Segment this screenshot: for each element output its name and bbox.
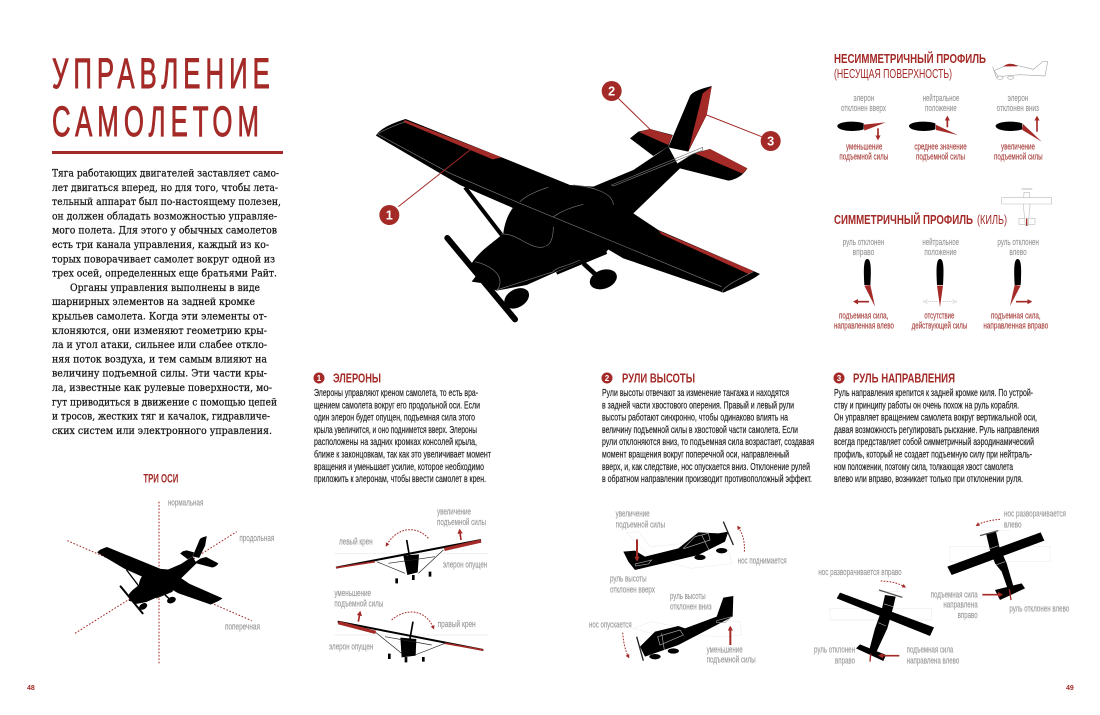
labels: grey states: положение: [925, 103, 957, 113]
labels: lift effect: подъемной силы: [916, 151, 965, 161]
nose up labels: увеличение: [616, 509, 650, 519]
icon: plane side outline: [993, 62, 1048, 79]
page number left: 48: [27, 685, 35, 692]
body text: щением самолета вокруг его продольной оси. Если: [314, 400, 480, 411]
body text: приложить к элеронам, чтобы ввести самолет в крен.: [314, 473, 486, 485]
heading: РУЛИ ВЫСОТЫ: [622, 370, 695, 386]
nose down labels: уменьшение: [707, 644, 743, 654]
symmetric diagrams: [834, 189, 1052, 330]
body text: в обратном направлении производит противоположный эффект.: [602, 473, 812, 485]
left roll labels: увеличение: [437, 506, 471, 516]
labels: lift effect: [839, 141, 1043, 161]
body text: в задней части хвостового оперения. Правый и левый рули: [602, 400, 794, 411]
yaw right labels: [814, 567, 959, 665]
right roll plane: [335, 612, 488, 662]
right roll labels: правый крен: [438, 619, 476, 629]
heading: (НЕСУЩАЯ ПОВЕРХНОСТЬ): [834, 66, 952, 81]
nose down labels: нос опускается: [589, 619, 632, 629]
callout lines: [398, 98, 762, 207]
text block: intro: Тяга работающих двигателей заставляет само-: [52, 168, 279, 180]
heading: РУЛЬ НАПРАВЛЕНИЯ: [853, 370, 955, 386]
labels: force: подъемная сила,: [991, 310, 1041, 320]
labels: grey states: руль отклонен: [997, 237, 1039, 247]
text block: intro: трех осей, определенных еще братьями Райт.: [52, 268, 277, 280]
body text: расположены на задних кромках консолей крыла,: [314, 437, 477, 448]
body text: вверх, и, как следствие, нос опускается вниз. Отклонение рулей: [602, 462, 810, 473]
yaw right labels: направлена влево: [907, 655, 959, 665]
labels: grey states: [841, 93, 1039, 113]
labels: grey states: отклонен вниз: [997, 103, 1039, 113]
nose up labels: [610, 509, 787, 594]
text block: intro: крыльев самолета. Когда эти элементы от-: [52, 310, 267, 322]
text block: intro: он должен обладать возможностью управляе-: [52, 210, 277, 222]
foils: [864, 259, 1021, 307]
body text: высоты работают синхронно, чтобы одинаково влиять на: [602, 412, 788, 424]
text block: intro: гут приводиться в движение с помощью цепей: [52, 396, 277, 408]
text block: intro: ла, известные как рулевые поверхности, мо-: [52, 382, 272, 394]
axis labels: нормальная: [168, 498, 203, 508]
left roll labels: левый крен: [339, 536, 373, 546]
airfoils: [837, 122, 1042, 142]
title: САМОЛЕТОМ: [52, 97, 259, 146]
diagram: yaw: [814, 509, 1069, 665]
callout 3: 3: [767, 135, 774, 149]
icon: number 1: [314, 372, 324, 384]
yaw right labels: подъемная сила: [907, 645, 953, 655]
nose up plane: [623, 522, 744, 570]
axis labels: продольная: [239, 533, 274, 543]
airfoil diagrams: [837, 62, 1048, 161]
panel: asymmetric airfoil: [834, 51, 1048, 161]
yaw right plane: [830, 581, 934, 662]
labels: force: действующей силы: [912, 320, 967, 330]
heading: ТРИ ОСИ: [143, 471, 178, 485]
left roll labels: элерон опущен: [443, 560, 487, 570]
labels: grey states: положение: [924, 247, 957, 257]
labels: grey states: нейтральное: [923, 93, 959, 103]
text block: intro: и тросов, жестких тяг и качалок, гидравличе-: [52, 411, 270, 423]
text block: intro: есть три канала управления, каждый из ко-: [52, 239, 269, 251]
icon: number 3: 3: [837, 374, 842, 383]
text block: intro: ла и угол атаки, сильнее или слабее откло-: [52, 339, 267, 351]
axis labels: поперечная: [225, 621, 260, 631]
icon: number 2: 2: [605, 374, 610, 383]
labels: grey states: нейтральное: [922, 237, 959, 247]
diagram: roll: [329, 506, 488, 662]
body text: [834, 388, 1039, 485]
right roll labels: [329, 588, 476, 651]
nose down labels: [589, 591, 756, 665]
labels: lift effect: подъемной силы: [839, 151, 888, 161]
nose down labels: руль высоты: [670, 591, 706, 601]
panel: three axes: [67, 471, 274, 665]
yaw left labels: вправо: [958, 610, 978, 620]
title: [52, 49, 283, 154]
yaw left labels: направлена: [943, 600, 978, 610]
labels: grey states: руль отклонен: [843, 237, 884, 247]
section: rudder: [834, 370, 1039, 485]
panel: symmetric airfoil: [834, 189, 1052, 330]
body text: величину подъемной силы в хвостовой части самолета. Если: [602, 425, 798, 436]
arrows: [878, 117, 1037, 139]
diagram: pitch: [589, 509, 787, 665]
text block: intro: [52, 168, 281, 437]
main airplane diagram: [376, 81, 781, 319]
nose down labels: подъемной силы: [707, 655, 756, 665]
axis labels: [168, 498, 274, 631]
yaw left labels: руль отклонен влево: [1009, 604, 1069, 614]
body text: Элероны управляют креном самолета, то есть вра-: [314, 388, 478, 399]
right roll labels: подъемной силы: [334, 599, 383, 609]
text block: intro: лет двигаться вперед, но для того, чтобы лета-: [52, 182, 278, 194]
text block: intro: няя поток воздуха, и тем самым влияют на: [52, 353, 267, 365]
callout 2: [602, 81, 622, 101]
airframe detail lines: [377, 122, 753, 293]
yaw left plane: [947, 519, 1050, 600]
icon: number 1: 1: [317, 374, 322, 383]
heading: СИММЕТРИЧНЫЙ ПРОФИЛЬ: [834, 212, 973, 227]
nose down labels: отклонен вниз: [670, 601, 712, 611]
left roll labels: [339, 506, 487, 570]
labels: grey states: элерон: [1008, 93, 1028, 103]
yaw left labels: [931, 509, 1069, 620]
text block: intro: клоняются, они изменяют геометрию кры-: [52, 325, 267, 337]
text block: intro: торых поворачивает самолет вокруг одной из: [52, 253, 275, 265]
page number right: 49: [1066, 685, 1074, 692]
title: УПРАВЛЕНИЕ: [52, 49, 270, 98]
yaw left labels: нос разворачивается: [1004, 509, 1066, 519]
callout 1: [379, 205, 399, 225]
nose up labels: руль высоты: [610, 574, 647, 584]
labels: grey states: [843, 237, 1039, 257]
labels: force: отсутствие: [924, 310, 954, 320]
labels: force: направленная вправо: [983, 320, 1048, 330]
body text: момент вращения вокруг поперечной оси, направленный: [602, 450, 789, 460]
axes: [67, 502, 252, 665]
labels: grey states: отклонен вверх: [841, 103, 886, 113]
text block: intro: шарнирных элементов на задней кромке: [52, 296, 255, 308]
text block: intro: величину подъемной силы. Эти части кры-: [52, 368, 267, 380]
body text: рули отклоняются вниз, то подъемная сила возрастает, создавая: [602, 437, 814, 448]
body text: [314, 388, 491, 485]
labels: grey states: вправо: [853, 247, 874, 257]
body text: вращения и уменьшает усилие, которое необходимо: [314, 461, 484, 473]
yaw right labels: вправо: [835, 655, 855, 665]
yaw left labels: подъемная сила: [931, 589, 978, 599]
labels: grey states: элерон: [853, 93, 874, 103]
body text: один элерон будет опущен, подъемная сила этого: [314, 412, 475, 424]
icon: number 2: [602, 372, 612, 384]
labels: lift effect: среднее значение: [914, 141, 967, 151]
callout 1: 1: [386, 209, 393, 223]
labels: lift effect: подъемной силы: [994, 151, 1043, 161]
right roll labels: элерон опущен: [329, 641, 373, 651]
yaw left labels: влево: [1004, 519, 1022, 529]
callout 3: [761, 131, 781, 151]
yaw right labels: руль отклонен: [814, 645, 855, 655]
labels: grey states: влево: [1009, 247, 1027, 257]
labels: force: [834, 310, 1048, 330]
labels: lift effect: увеличение: [1001, 141, 1035, 151]
yaw right labels: нос разворачивается вправо: [818, 567, 902, 577]
arrows: [855, 300, 1031, 304]
nose up labels: нос поднимается: [738, 555, 787, 565]
left roll labels: подъемной силы: [437, 517, 486, 527]
nose up labels: отклонен вверх: [610, 584, 655, 594]
icon: plane top outline: [1002, 189, 1052, 226]
section: elevators: [602, 370, 814, 485]
icon: number 3: [834, 372, 844, 384]
text block: intro: Органы управления выполнены в виде: [70, 282, 260, 294]
body text: ближе к законцовкам, так как это увеличивает момент: [314, 448, 491, 460]
text block: intro: тельный аппарат был по-настоящему полезен,: [52, 196, 281, 208]
labels: force: подъемная сила,: [839, 310, 888, 320]
right roll labels: уменьшение: [334, 588, 371, 598]
section: ailerons: [314, 370, 491, 485]
nose up labels: подъемной силы: [616, 519, 665, 529]
nose down plane: [623, 596, 742, 661]
red control surfaces: [403, 87, 753, 274]
heading: ЭЛЕРОНЫ: [333, 370, 381, 386]
text block: intro: мого полета. Для этого у обычных самолетов: [52, 225, 277, 237]
heading: (КИЛЬ): [977, 212, 1007, 227]
body text: [602, 388, 814, 485]
labels: force: направленная влево: [834, 320, 894, 330]
left roll plane: [335, 530, 488, 583]
heading: [834, 51, 986, 81]
body text: крыла увеличится, и оно поднимется вверх. Элероны: [314, 425, 477, 436]
heading: НЕСИММЕТРИЧНЫЙ ПРОФИЛЬ: [834, 51, 986, 66]
small airplane: [97, 536, 223, 613]
labels: lift effect: уменьшение: [846, 141, 882, 151]
callout 2: 2: [608, 84, 615, 98]
body text: Рули высоты отвечают за изменение тангажа и находятся: [602, 388, 789, 399]
text block: intro: ских систем или электронного управления.: [52, 425, 272, 437]
